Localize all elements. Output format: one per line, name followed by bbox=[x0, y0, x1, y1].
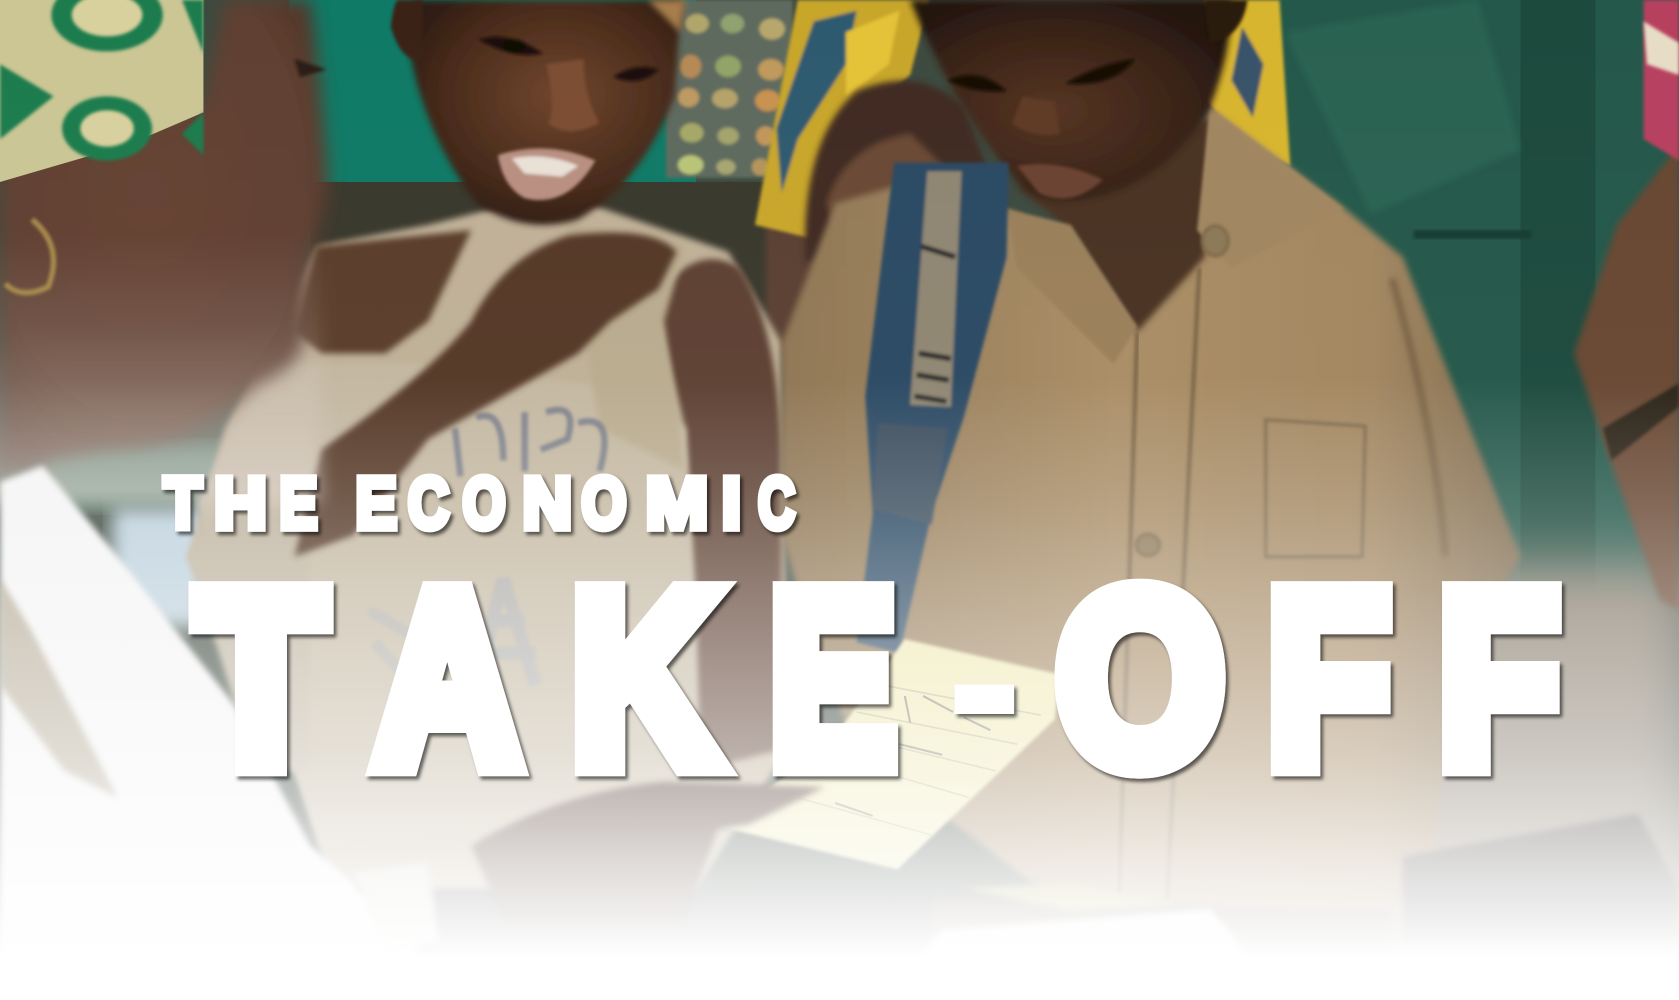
main title: take-off: - bbox=[949, 566, 1020, 797]
subtitle: the economic: H bbox=[214, 463, 267, 544]
subtitle: the economic: E bbox=[279, 462, 317, 543]
lower garments and paper bbox=[878, 814, 1679, 1000]
lattice vent bbox=[666, 0, 792, 178]
woman in foreground: face bbox=[0, 0, 328, 503]
subtitle: the economic: O bbox=[463, 462, 505, 544]
right person arm and cloth bbox=[1574, 0, 1679, 610]
subtitle: the economic: E bbox=[356, 463, 397, 544]
boy two: head bbox=[910, 0, 1247, 201]
subtitle: the economic: C bbox=[758, 463, 795, 544]
subtitle: the economic: O bbox=[581, 462, 626, 543]
boy one: head bbox=[391, 0, 685, 225]
subtitle: the economic: I bbox=[722, 463, 741, 544]
woman in foreground: headscarf bbox=[0, 0, 203, 182]
subtitle: the economic bbox=[164, 462, 795, 544]
subtitle: the economic: N bbox=[523, 462, 572, 543]
third child behind bbox=[805, 81, 990, 262]
main title: take-off: E bbox=[770, 542, 896, 816]
main title: take-off: F bbox=[1268, 541, 1390, 816]
main title: take-off: O bbox=[1057, 540, 1224, 816]
woman's hand holding card bbox=[353, 782, 825, 953]
boy one: shirt and arm bbox=[187, 193, 787, 889]
main title: take-off: T bbox=[197, 541, 325, 816]
main title: take-off bbox=[197, 540, 1559, 817]
vaccination card bbox=[720, 639, 1060, 869]
boy one: hand bbox=[294, 232, 677, 557]
subtitle: the economic: C bbox=[408, 462, 449, 543]
boy two: shirt pocket and buttons bbox=[1136, 226, 1365, 557]
subtitle: the economic: M bbox=[646, 462, 708, 544]
boy two: shirt bbox=[782, 107, 1521, 921]
backpack strap bbox=[857, 163, 1009, 653]
woman in foreground: white garment bbox=[0, 466, 450, 1000]
boy one: shirt print bbox=[369, 410, 604, 685]
main title: take-off: A bbox=[375, 541, 520, 816]
subtitle: the economic: T bbox=[164, 463, 202, 544]
yellow fabric bbox=[755, 0, 1290, 238]
main title: take-off: K bbox=[572, 541, 718, 816]
main title: take-off: F bbox=[1439, 542, 1559, 817]
